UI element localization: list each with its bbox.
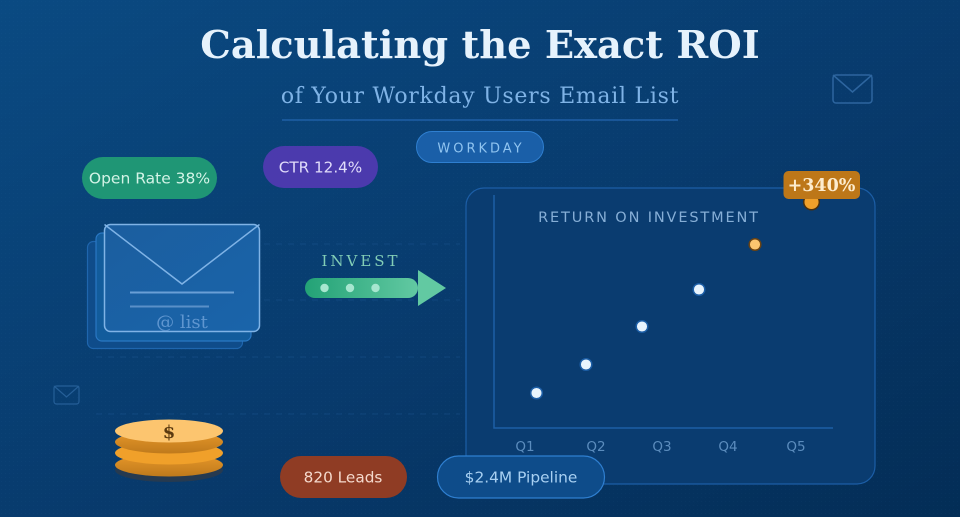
subtitle: of Your Workday Users Email List [281, 84, 679, 109]
x axis labels: Q2 [586, 439, 606, 455]
pill: ctr [263, 146, 378, 188]
callout: +340%: +340% [788, 176, 856, 196]
x axis labels: Q1 [515, 439, 535, 455]
badge: workday: WORKDAY [437, 142, 525, 156]
badge: workday [416, 132, 544, 162]
x axis labels: Q3 [652, 439, 672, 455]
x axis labels: Q5 [786, 439, 806, 455]
icon: decorative envelope top right [833, 75, 872, 103]
icon: envelope stack: @ list [156, 312, 209, 333]
pill: open rate: Open Rate 38% [89, 170, 210, 188]
pill: open rate [82, 157, 217, 199]
chart axes [494, 195, 833, 428]
arrow: invest [305, 270, 446, 306]
pill: leads: 820 Leads [304, 468, 382, 486]
pill: pipeline [438, 456, 604, 498]
x axis labels [515, 439, 806, 455]
data points [531, 194, 819, 399]
x axis labels: Q4 [718, 439, 738, 455]
chart heading: RETURN ON INVESTMENT [538, 210, 760, 226]
icon: coin stack [115, 420, 223, 482]
pill: pipeline: $2.4M Pipeline [465, 468, 577, 486]
invest label: INVEST [321, 252, 401, 270]
pill: leads [280, 456, 407, 498]
icon: envelope stack [88, 224, 260, 348]
icon: coin stack: $ [163, 422, 175, 443]
callout: +340% [784, 171, 860, 199]
icon: decorative envelope left [54, 386, 79, 404]
pill: ctr: CTR 12.4% [279, 158, 362, 176]
panel: return on investment chart [466, 188, 875, 484]
title: Calculating the Exact ROI [200, 23, 760, 68]
